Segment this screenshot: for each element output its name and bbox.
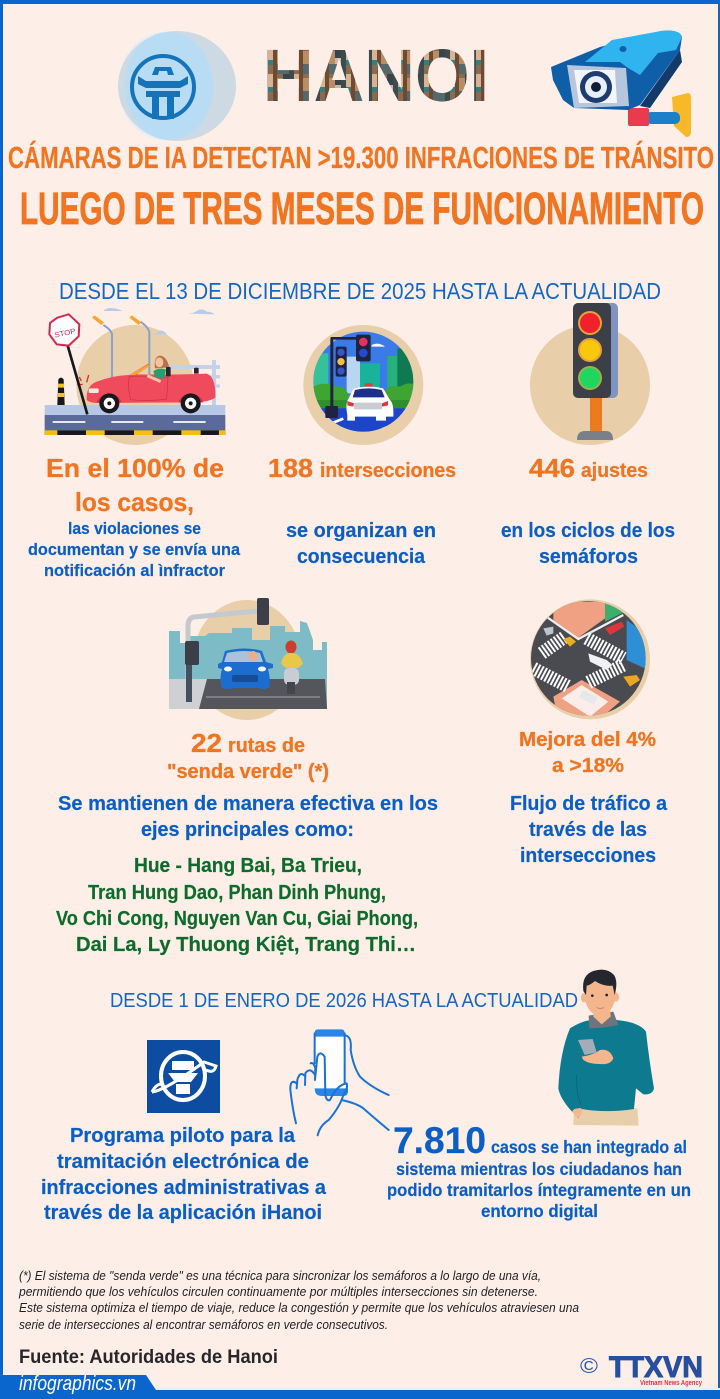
description: ejes principales como: xyxy=(141,819,354,841)
icon: hand holding phone xyxy=(290,1029,389,1135)
logo: TTXVN: Vietnam News Agency xyxy=(640,1380,702,1387)
footnote: permitiendo que los vehículos circulen continuamente por múltiples intersecciones sin detenerse. xyxy=(18,1284,538,1299)
stat label line 2: "senda verde" (*) xyxy=(167,761,329,783)
description xyxy=(286,520,436,568)
panel: 188 intersections xyxy=(268,325,456,568)
logo: TTXVN: © xyxy=(580,1355,599,1378)
list of main axes: Tran Hung Dao, Phan Dinh Phung, xyxy=(88,882,386,904)
section heading: since 1 January: DESDE 1 DE ENERO DE 2026 HASTA LA ACTUALIDAD xyxy=(110,990,578,1012)
stat: 188: 188 xyxy=(268,453,313,483)
description xyxy=(58,793,438,841)
stat: 4% to 18% xyxy=(519,729,656,777)
description: semáforos xyxy=(539,546,638,568)
description: infracciones administrativas a xyxy=(41,1177,327,1199)
stat: 4% to 18%: Mejora del 4% xyxy=(519,729,656,751)
panel: documented violations xyxy=(28,308,241,580)
description xyxy=(28,519,241,580)
description: consecuencia xyxy=(297,546,426,568)
icon: car hitting stop sign: STOP xyxy=(54,326,76,340)
stat: 22: 22 xyxy=(191,728,222,758)
description: podido tramitarlos íntegramente en un xyxy=(387,1180,691,1200)
stat label: ajustes xyxy=(581,460,648,482)
stat: 7.810: 7.810 xyxy=(393,1120,486,1161)
panel: traffic flow improvement xyxy=(510,595,668,867)
description: través de las xyxy=(529,819,647,841)
list of main axes xyxy=(56,855,418,956)
list of main axes: Hue - Hang Bai, Ba Trieu, xyxy=(134,855,362,877)
source: Fuente: Autoridades de Hanoi xyxy=(19,1347,278,1368)
description: casos se han integrado al xyxy=(491,1137,687,1157)
description: sistema mientras los ciudadanos han xyxy=(396,1159,682,1179)
description: en los ciclos de los xyxy=(501,520,675,542)
stat continued: los casos, xyxy=(75,487,194,517)
description xyxy=(387,1137,691,1221)
description: Se mantienen de manera efectiva en los xyxy=(58,793,438,815)
logo: TTXVN xyxy=(580,1351,703,1387)
icon: Hanoi emblem xyxy=(118,31,236,141)
icon: traffic light xyxy=(530,303,650,445)
stat: 4% to 18%: a >18% xyxy=(552,755,624,777)
description: Flujo de tráfico a xyxy=(510,793,668,815)
description: documentan y se envía una xyxy=(28,540,241,559)
description xyxy=(501,520,675,568)
description: través de la aplicación iHanoi xyxy=(44,1202,322,1224)
description: entorno digital xyxy=(481,1201,598,1221)
description: tramitación electrónica de xyxy=(57,1151,309,1173)
stat: 446: 446 xyxy=(529,453,575,483)
footer bar xyxy=(0,1373,720,1399)
section heading: since 13 December: DESDE EL 13 DE DICIEMBRE DE 2025 HASTA LA ACTUALIDAD xyxy=(59,278,661,304)
stat label: intersecciones xyxy=(320,460,456,482)
panel: iHanoi pilot xyxy=(41,1029,389,1224)
panel: 7,810 cases xyxy=(387,970,691,1221)
description xyxy=(510,793,668,867)
icon: car hitting stop sign xyxy=(45,308,225,445)
icon: isometric intersection xyxy=(525,595,652,722)
icon: iHanoi app xyxy=(147,1040,220,1113)
description: se organizan en xyxy=(286,520,436,542)
list of main axes: Dai La, Ly Thuong Kiệt, Trang Thi… xyxy=(76,934,416,956)
heading: HANOI: HANOI xyxy=(263,34,489,117)
stat label: rutas de xyxy=(228,735,305,757)
description: Programa piloto para la xyxy=(70,1125,296,1147)
stat: 100% of cases: En el 100% de xyxy=(46,453,224,483)
description xyxy=(41,1125,327,1224)
website: infographics.vn xyxy=(19,1373,136,1395)
panel: 446 adjustments xyxy=(501,303,675,568)
icon: city street with car xyxy=(303,325,423,445)
description: intersecciones xyxy=(520,845,656,867)
list of main axes: Vo Chi Cong, Nguyen Van Cu, Giai Phong, xyxy=(56,908,418,930)
logo: TTXVN: TTXVN xyxy=(609,1351,703,1384)
panel: green wave routes xyxy=(56,598,438,956)
icon: security camera xyxy=(551,31,691,137)
description: las violaciones se xyxy=(68,519,201,538)
icon: man with smartphone xyxy=(558,970,654,1126)
footnote: Este sistema optimiza el tiempo de viaje, reduce la congestión y permite que los vehículos atraviesen una xyxy=(19,1300,579,1315)
footnote: serie de intersecciones al encontrar semáforos en verde consecutivos. xyxy=(19,1317,388,1332)
icon: car and motorcycle at traffic light xyxy=(169,598,327,720)
footnote: (*) El sistema de "senda verde" es una técnica para sincronizar los semáforos a lo largo de una vía, xyxy=(19,1268,541,1283)
footnote xyxy=(18,1268,579,1332)
description: notificación al ìnfractor xyxy=(44,561,225,580)
